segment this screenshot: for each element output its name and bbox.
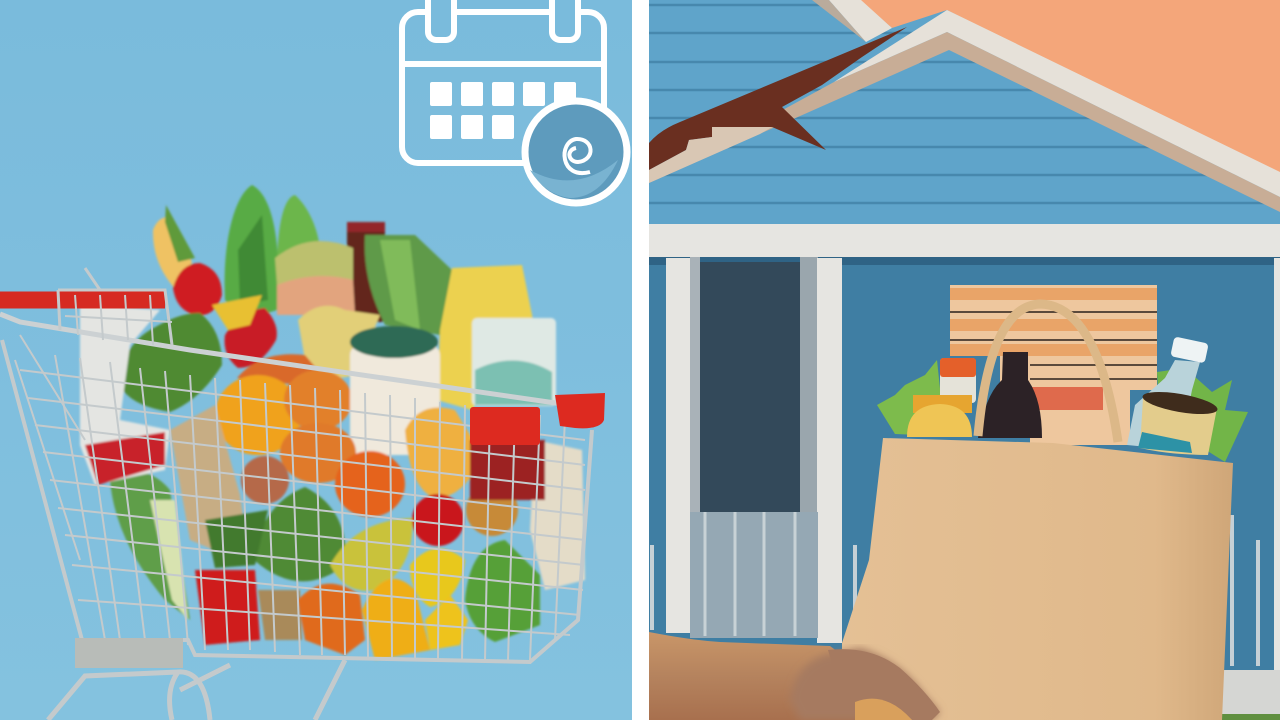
door and posts: [649, 257, 1280, 678]
house siding: [649, 0, 1280, 224]
porch beam: [649, 224, 1280, 257]
hand holding bag: [649, 632, 940, 720]
groceries in cart: [60, 185, 585, 660]
bench: [950, 285, 1157, 445]
shopping cart: [0, 268, 592, 720]
panel: shopping cart: [0, 0, 632, 720]
panel: porch delivery: [649, 0, 1280, 720]
fence: [652, 515, 1280, 720]
groceries in bag: [877, 336, 1248, 462]
red cart handles: [470, 393, 605, 445]
roof: [649, 0, 1280, 212]
icon: calendar with clock: [402, 0, 627, 203]
grocery bag: [842, 304, 1233, 720]
